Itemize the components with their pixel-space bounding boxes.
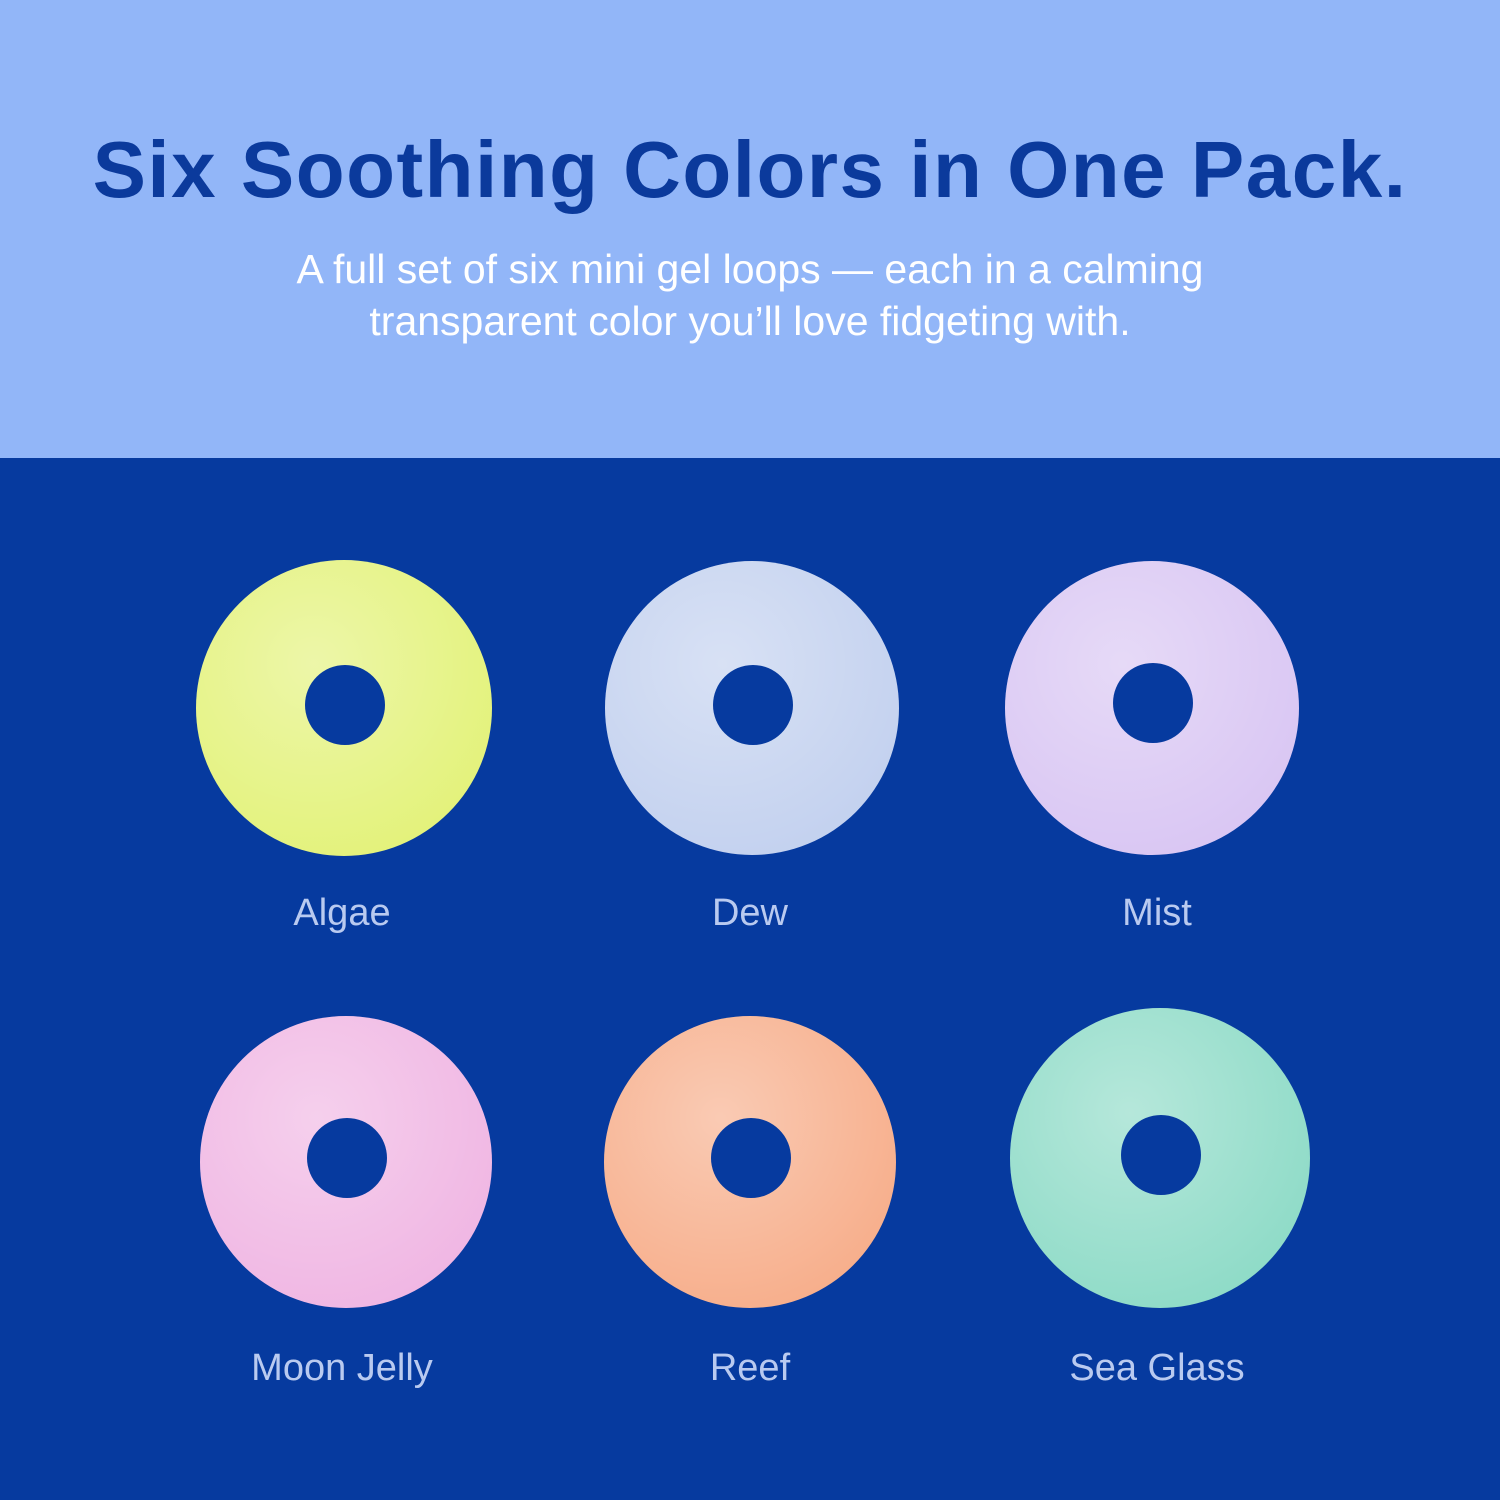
label: Moon Jelly: Moon Jelly [251,1347,433,1389]
ring: Algae [196,560,492,856]
subtitle: transparent color you’ll love fidgeting with. [369,298,1131,344]
subtitle [296,246,1204,344]
ring: Dew [605,561,899,855]
label: Dew: Dew [712,892,788,934]
ring: Moon Jelly [200,1016,492,1308]
label: Mist: Mist [1122,892,1192,934]
header band [0,0,1500,458]
label: Reef: Reef [710,1347,790,1389]
ring: Sea Glass [1010,1008,1310,1308]
product panel background [0,458,1500,1500]
ring: Reef [604,1016,896,1308]
title: Six Soothing Colors in One Pack. [93,125,1407,214]
subtitle: A full set of six mini gel loops — each in a calming [296,246,1204,292]
label: Algae: Algae [293,892,391,934]
ring: Mist [1005,561,1299,855]
label: Sea Glass: Sea Glass [1069,1347,1245,1389]
